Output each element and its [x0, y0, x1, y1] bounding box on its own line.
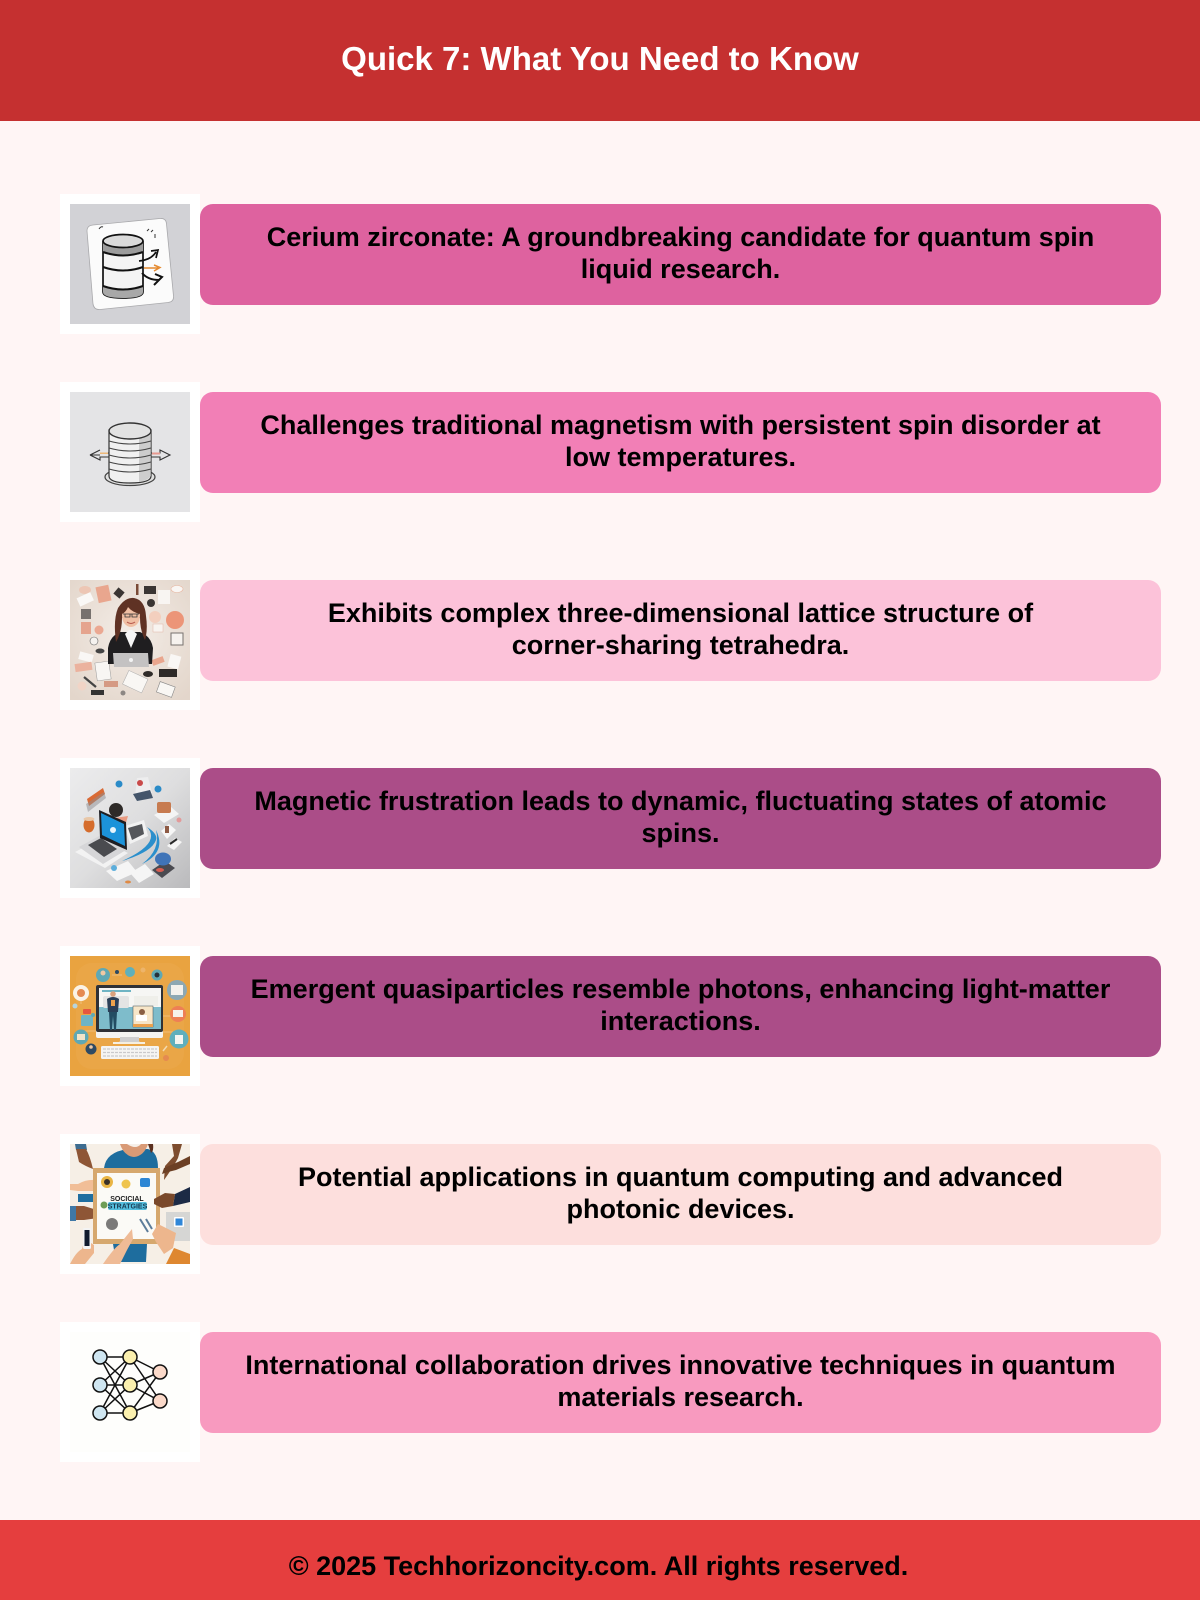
statement bar 4: Magnetic frustration leads to dynamic, fluctuating states of atomic — [254, 786, 1107, 816]
statement bar 2: low temperatures. — [565, 442, 796, 472]
footer banner: © 2025 Techhorizoncity.com. All rights reserved. — [289, 1551, 908, 1581]
statement bar 7 — [200, 1332, 1161, 1433]
statement bar 7: materials research. — [557, 1382, 804, 1412]
panel: item 4 — [60, 758, 1161, 898]
icon: neural network diagram — [60, 1322, 200, 1462]
statement bar 6: photonic devices. — [566, 1194, 795, 1224]
statement bar 5: Emergent quasiparticles resemble photons, enhancing light-matter — [251, 974, 1110, 1004]
statement bar 6: Potential applications in quantum computing and advanced — [298, 1162, 1063, 1192]
icon: hands around social strategies board: STRATGIES — [108, 1204, 148, 1210]
icon: database cylinder on tilted card — [60, 194, 200, 334]
panel: item 3 — [60, 570, 1161, 710]
panel: item 6 — [60, 1134, 1161, 1274]
panel: item 1 — [60, 194, 1161, 334]
icon: businesswoman with laptop and stationery — [60, 570, 200, 710]
statement bar 1: liquid research. — [581, 254, 780, 284]
panel: item 5 — [60, 946, 1161, 1086]
statement bar 5: interactions. — [600, 1006, 761, 1036]
footer banner — [0, 1520, 1200, 1600]
statement bar 6 — [200, 1144, 1161, 1245]
icon: monitor with presenter on orange background — [60, 946, 200, 1086]
statement bar 1: Cerium zirconate: A groundbreaking candidate for quantum spin — [267, 222, 1094, 252]
icon: hands around social strategies board: SOCICIAL — [110, 1196, 144, 1203]
header banner — [0, 0, 1200, 121]
statement bar 4: spins. — [641, 818, 720, 848]
statement bar 7: International collaboration drives innovative techniques in quantum — [245, 1350, 1116, 1380]
statement bar 2 — [200, 392, 1161, 493]
panel: item 2 — [60, 382, 1161, 522]
statement bar 2: Challenges traditional magnetism with persistent spin disorder at — [260, 410, 1101, 440]
statement bar 3: Exhibits complex three-dimensional lattice structure of — [328, 598, 1033, 628]
statement bar 4 — [200, 768, 1161, 869]
icon: striped cylinder with arrows — [60, 382, 200, 522]
icon: isometric laptop workspace — [60, 758, 200, 898]
icon: hands around social strategies board — [60, 1134, 200, 1274]
panel: item 7 — [60, 1322, 1161, 1462]
statement bar 3 — [200, 580, 1161, 681]
statement bar 5 — [200, 956, 1161, 1057]
statement bar 3: corner-sharing tetrahedra. — [512, 630, 849, 660]
header banner: Quick 7: What You Need to Know — [341, 40, 859, 77]
statement bar 1 — [200, 204, 1161, 305]
